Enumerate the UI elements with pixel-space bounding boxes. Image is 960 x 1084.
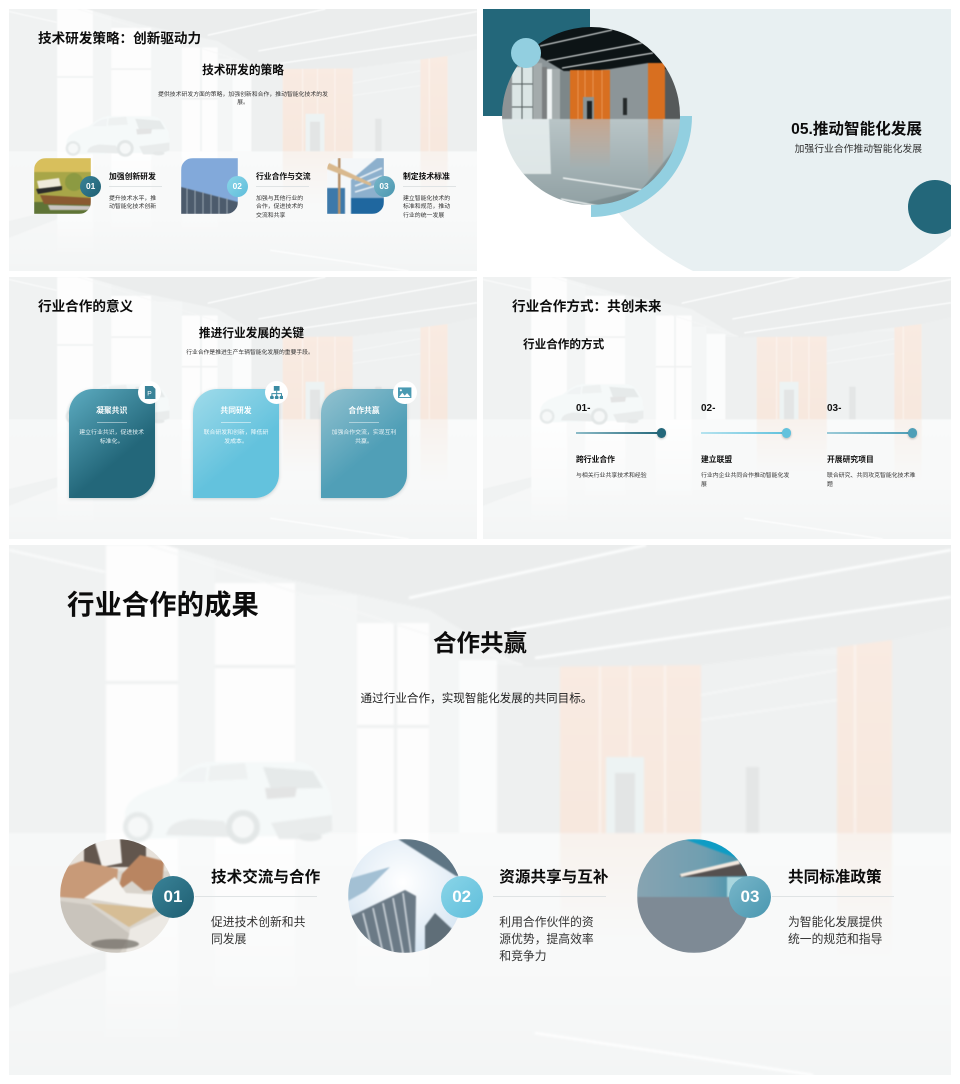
badge 02 [441, 876, 483, 918]
card: win-win: 加强合作交流，实现互利 [332, 430, 396, 436]
photo: signing document [60, 839, 170, 953]
item text: 交流和共享 [256, 213, 285, 219]
timeline step 03: 03- [827, 403, 841, 414]
item text [109, 195, 156, 210]
photo: concrete hall [637, 839, 748, 953]
item text: 同发展 [211, 932, 246, 946]
timeline step 02: 02- [701, 403, 715, 414]
panel: cooperation results slide [9, 545, 951, 1075]
timeline step 03: 联合研究、共同攻克智能化技术难 [827, 473, 915, 479]
item text [788, 914, 882, 946]
card: win-win: 合作共赢 [348, 406, 380, 415]
item text: 源优势，提高效率 [499, 932, 594, 946]
intro text: 展。 [237, 100, 249, 106]
timeline step 03 [827, 403, 918, 488]
subheading: 推进行业发展的关键 [199, 327, 304, 340]
item text: 合作，促进技术的 [256, 204, 303, 210]
badge 03: 03 [379, 180, 389, 190]
badge 02: 02 [452, 886, 471, 906]
intro text [158, 91, 328, 106]
timeline step 01: 跨行业合作 [576, 455, 615, 464]
badge 03 [374, 176, 394, 196]
title: 行业合作方式：共创未来 [512, 299, 662, 314]
card: joint research: 发成本。 [224, 438, 248, 444]
item text: 和竞争力 [499, 948, 546, 962]
item text: 加强与其他行业的 [256, 196, 303, 202]
intro text: 提供技术研发方面的策略，加强创新和合作，推动智能化技术的发 [158, 92, 328, 98]
item heading: 加强创新研发 [109, 172, 156, 181]
timeline step 01: 01- [576, 403, 590, 414]
item text [256, 195, 303, 219]
badge 03: 03 [741, 886, 759, 906]
card: win-win: 共赢。 [355, 438, 373, 444]
item text: 利用合作伙伴的资 [499, 914, 594, 928]
item text: 统一的规范和指导 [788, 932, 882, 946]
section title: 05.推动智能化发展 [791, 121, 922, 138]
item text: 提升技术水平，推 [109, 196, 156, 202]
timeline step 01 [576, 403, 667, 479]
cover artwork [483, 9, 951, 271]
subheading: 技术研发的策略 [202, 64, 284, 77]
photo: glass tower [327, 158, 384, 214]
photo: blue sky building [181, 158, 238, 214]
section subtitle: 加强行业合作推动智能化发展 [795, 144, 922, 155]
panel: meaning of cooperation slide [9, 277, 477, 539]
badge 03 [729, 876, 771, 918]
badge 02 [227, 176, 248, 196]
icon: picture [393, 381, 417, 404]
badge 01 [80, 176, 101, 196]
title: 技术研发策略：创新驱动力 [38, 31, 201, 46]
item text: 动智能化技术创新 [109, 204, 156, 210]
card: joint research: 联合研发和创新，降低研 [204, 430, 268, 436]
subheading: 合作共赢 [433, 630, 527, 656]
card: win-win [321, 389, 407, 498]
panel: section cover 05 [483, 9, 951, 271]
title: 行业合作的成果 [67, 589, 259, 620]
photo: books on grass [34, 158, 91, 214]
item text: 标准和规范，推动 [403, 204, 450, 210]
badge 01: 01 [86, 180, 95, 190]
timeline step 03: 开展研究项目 [827, 455, 874, 464]
badge 01: 01 [164, 886, 182, 906]
panel: cooperation modes slide [483, 277, 951, 539]
card: joint research: 共同研发 [220, 406, 252, 415]
item text: 建立智能化技术的 [403, 196, 450, 202]
title: 行业合作的意义 [38, 299, 133, 314]
timeline step 01: 与相关行业共享技术和经验 [576, 473, 647, 479]
icon: org chart [265, 381, 288, 404]
item text: 为智能化发展提供 [788, 914, 882, 928]
item text [499, 914, 594, 962]
icon: document [138, 381, 161, 404]
item heading: 资源共享与互补 [499, 869, 608, 886]
card: consensus: 标准化。 [100, 438, 123, 444]
item heading: 行业合作与交流 [256, 172, 311, 181]
item text: 促进技术创新和共 [211, 914, 305, 928]
photo: skyscrapers [348, 839, 458, 953]
item text: 行业的统一发展 [403, 213, 444, 219]
badge 02: 02 [233, 180, 242, 190]
item heading: 制定技术标准 [403, 172, 450, 181]
timeline step 02: 展 [701, 482, 707, 488]
panel: R&D strategy slide [9, 9, 477, 271]
timeline step 02: 行业内企业共同合作推动智能化发 [701, 473, 789, 479]
badge 01 [152, 876, 194, 918]
item text [403, 195, 450, 219]
timeline step 03: 题 [827, 482, 833, 488]
icon: document: P [147, 391, 152, 398]
card: joint research [193, 389, 279, 498]
timeline step 02 [701, 403, 792, 488]
card: consensus: 凝聚共识 [96, 406, 127, 415]
item heading: 共同标准政策 [788, 869, 882, 886]
card: consensus [69, 389, 155, 498]
subheading: 行业合作的方式 [523, 338, 604, 351]
intro text: 行业合作是推进生产车辆智能化发展的重要手段。 [186, 350, 314, 356]
item text [211, 914, 305, 946]
intro text: 通过行业合作，实现智能化发展的共同目标。 [361, 692, 592, 705]
timeline step 02: 建立联盟 [701, 455, 732, 464]
card: consensus: 建立行业共识，促进技术 [79, 430, 144, 436]
item heading: 技术交流与合作 [211, 869, 320, 886]
